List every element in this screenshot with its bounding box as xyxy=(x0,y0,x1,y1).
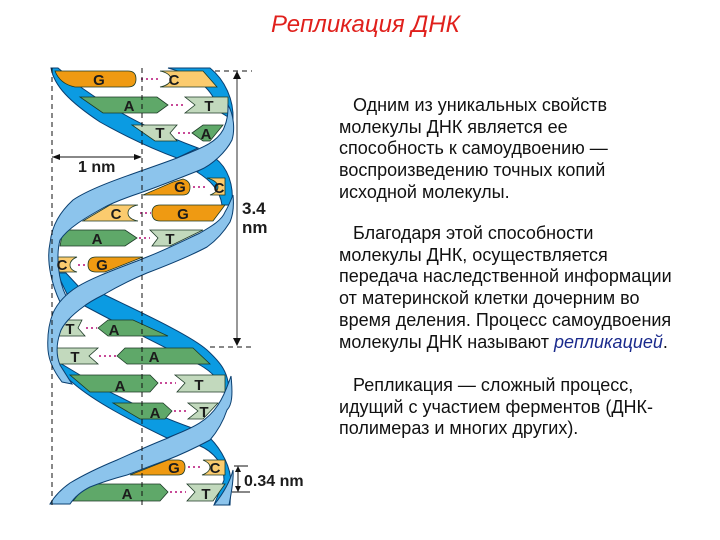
base labels: A xyxy=(109,322,120,339)
base labels: A xyxy=(201,126,212,143)
base labels: T xyxy=(204,98,214,115)
text block: paragraph 3: Репликация — сложный процесс, xyxy=(353,375,633,395)
light blue strand segments xyxy=(48,105,234,505)
text block: paragraph 1: молекулы ДНК является ее xyxy=(339,117,568,137)
text block: paragraph 1 xyxy=(339,95,608,202)
text block: paragraph 2: молекулы ДНК, осуществляется xyxy=(339,245,608,265)
base labels: T xyxy=(70,349,80,366)
measure labels: 3.4 xyxy=(242,199,266,218)
text block: paragraph 1: Одним из уникальных свойств xyxy=(353,95,607,115)
text block: paragraph 1: воспроизведению точных копий xyxy=(339,160,605,180)
row 13: A-T xyxy=(73,484,225,501)
base labels: G xyxy=(174,179,186,196)
text block: paragraph 3 xyxy=(339,375,653,438)
row 7: C-G xyxy=(55,257,143,272)
base labels: T xyxy=(199,404,209,421)
row 5: C-G xyxy=(83,205,225,221)
base labels: A xyxy=(124,98,135,115)
base labels: T xyxy=(155,125,165,142)
row 3: T-A xyxy=(132,125,223,141)
text block: paragraph 1: способность к самоудвоению — xyxy=(339,138,608,158)
row 4: G-C xyxy=(143,178,225,195)
measure labels: 1 nm xyxy=(78,159,115,176)
row 10: A-T xyxy=(70,375,225,392)
base labels: A xyxy=(150,405,161,422)
base labels: C xyxy=(111,206,122,223)
text block: paragraph 1: исходной молекулы. xyxy=(339,182,510,202)
text block: paragraph 2 xyxy=(339,223,672,352)
measure labels: nm xyxy=(242,218,268,237)
text block: paragraph 3: полимераз и многих других). xyxy=(339,418,578,438)
base labels: G xyxy=(93,72,105,89)
base labels: T xyxy=(194,377,204,394)
row 2: A-T xyxy=(80,97,228,113)
base labels: A xyxy=(122,486,133,503)
base labels: C xyxy=(210,460,221,477)
base labels: G xyxy=(96,257,108,274)
base pairs xyxy=(55,71,228,501)
text block: paragraph 2: Благодаря этой способности xyxy=(353,223,593,243)
row 12: G-C xyxy=(130,460,225,475)
base labels xyxy=(57,72,225,503)
guide lines and measures xyxy=(52,68,252,505)
base labels: G xyxy=(168,460,180,477)
base labels: T xyxy=(165,231,175,248)
hydrogen bonds xyxy=(78,79,206,492)
base labels: A xyxy=(149,349,160,366)
base labels: A xyxy=(92,231,103,248)
text block: paragraph 2: молекулы ДНК называют репликацией. xyxy=(339,332,668,352)
measure labels xyxy=(78,159,304,490)
text block: paragraph 2: передача наследственной информации xyxy=(339,266,672,286)
base labels: T xyxy=(201,486,211,503)
row 1: G-C xyxy=(55,71,217,87)
row 8: T-A xyxy=(57,320,168,336)
text block: paragraph 2: время деления. Процесс самоудвоения xyxy=(339,310,671,330)
base labels: G xyxy=(177,206,189,223)
base labels: C xyxy=(214,180,225,197)
title: Репликация ДНК xyxy=(271,11,460,38)
base labels: C xyxy=(57,257,68,274)
text block: paragraph 2: от материнской клетки дочерним во xyxy=(339,288,639,308)
base labels: C xyxy=(169,72,180,89)
dark blue strand segments xyxy=(49,68,233,505)
text block: paragraph 3: идущий с участием ферментов (ДНК- xyxy=(339,397,653,417)
row 11: A-T xyxy=(113,403,218,419)
row 9: T-A xyxy=(55,348,210,364)
base labels: A xyxy=(115,378,126,395)
arrowheads xyxy=(52,71,241,492)
row 6: A-T xyxy=(60,230,203,246)
measure labels: 0.34 nm xyxy=(244,473,304,490)
base labels: T xyxy=(65,321,75,338)
